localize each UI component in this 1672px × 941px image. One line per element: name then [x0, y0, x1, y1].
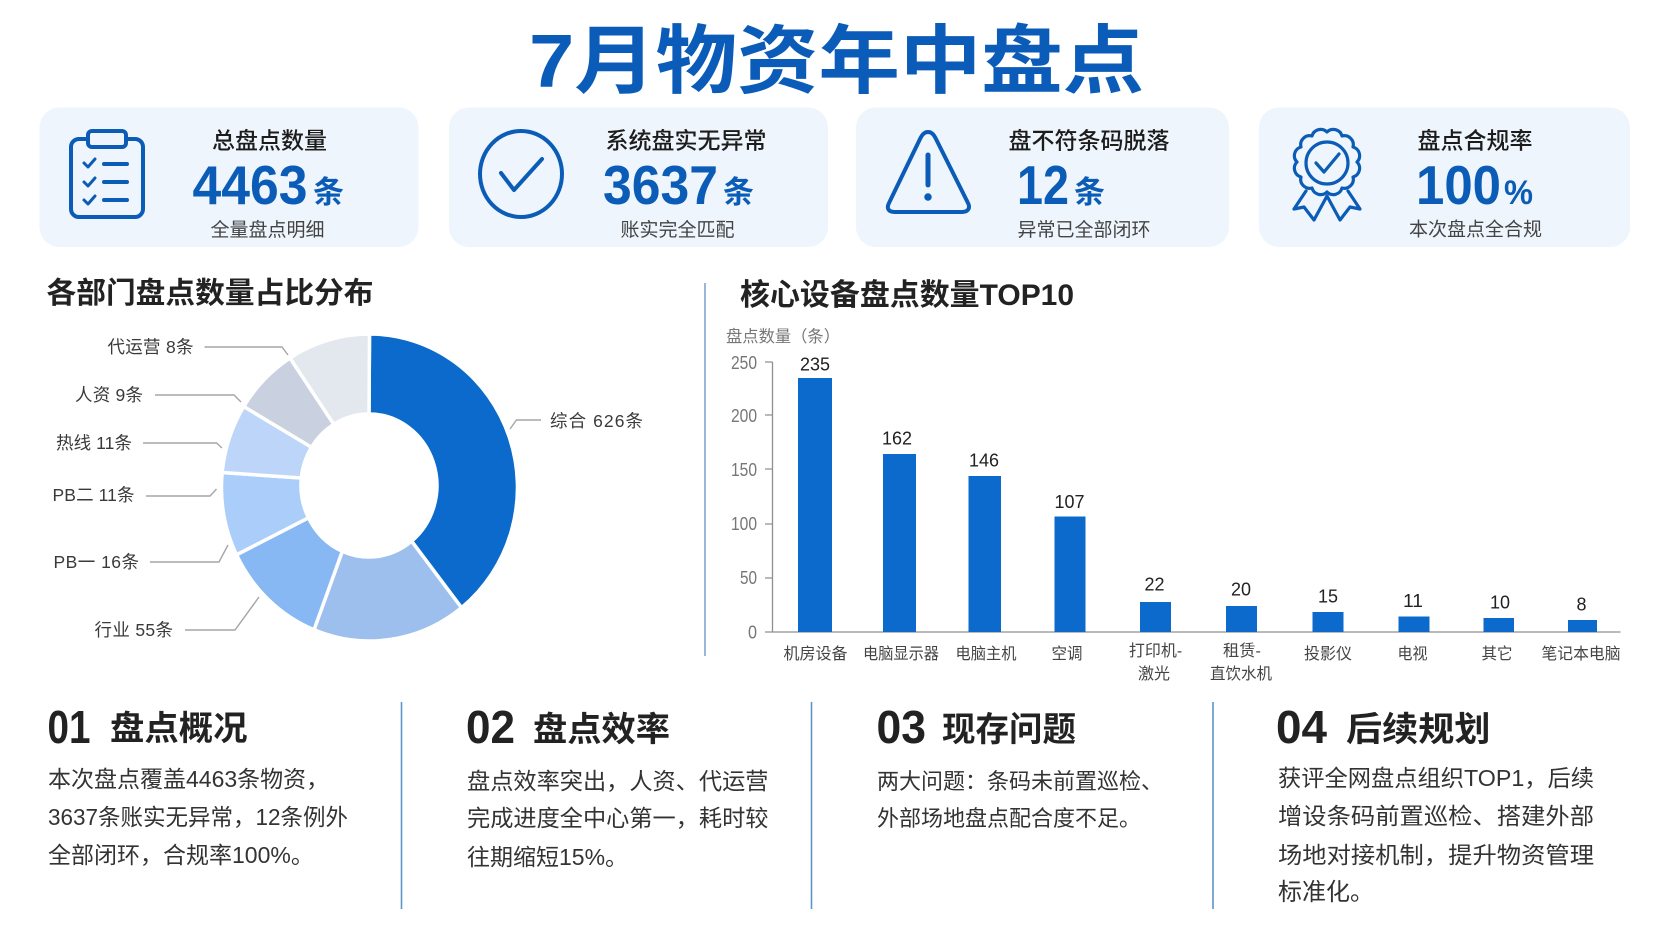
- donut chart: [221, 334, 517, 641]
- body: [877, 769, 1163, 831]
- y tick labels: 150: [731, 460, 757, 480]
- slice: 行业 (next): [314, 541, 462, 641]
- value labels: [800, 354, 1586, 614]
- heading: 现存问题: [942, 711, 1076, 749]
- body: 增设条码前置巡检、搭建外部: [1278, 803, 1594, 829]
- category labels: 笔记本电脑: [1542, 645, 1620, 663]
- category labels: 机房设备: [784, 645, 848, 663]
- category labels: 空调: [1052, 645, 1082, 663]
- heading: bar chart: 核心设备盘点数量TOP10: [740, 279, 1074, 312]
- heading: 后续规划: [1346, 711, 1490, 749]
- heading: total count: 总盘点数量: [212, 128, 327, 154]
- body: [1278, 765, 1594, 906]
- donut labels: 人资 9条: [75, 385, 143, 405]
- donut labels: PB一 16条: [54, 552, 139, 572]
- block: 04 plan: [1276, 701, 1594, 906]
- category labels: 其它: [1482, 645, 1512, 663]
- value labels: 235: [800, 354, 830, 374]
- value: 12: 12: [1017, 154, 1069, 216]
- value labels: 11: [1403, 590, 1423, 611]
- heading: no anomaly: 系统盘实无异常: [606, 128, 766, 154]
- panel: compliance card: [1259, 108, 1630, 247]
- y tick labels: 250: [731, 353, 757, 373]
- slice: 综合: [369, 334, 517, 608]
- body: 3637条账实无异常，12条例外: [48, 804, 348, 830]
- category labels: [784, 642, 1620, 683]
- unit: 条: [723, 175, 754, 210]
- heading: compliance: 盘点合规率: [1418, 128, 1532, 154]
- body: 场地对接机制，提升物资管理: [1278, 842, 1594, 868]
- bar chart: [731, 353, 1620, 683]
- slice: 55: [236, 518, 342, 630]
- slice: PB二: [222, 406, 312, 478]
- donut labels: 行业 55条: [94, 620, 173, 640]
- body: 外部场地盘点配合度不足。: [877, 806, 1141, 831]
- unit: 条: [313, 175, 344, 210]
- panel: no anomaly card: [449, 108, 828, 247]
- category labels: 直饮水机: [1210, 665, 1272, 683]
- body: [48, 766, 348, 868]
- bars: [798, 378, 1597, 632]
- heading: 盘点概况: [110, 710, 248, 748]
- body: 盘点效率突出，人资、代运营: [467, 768, 768, 794]
- donut labels: 代运营 8条: [108, 337, 194, 357]
- category labels: 激光: [1138, 665, 1170, 683]
- axis title: 盘点数量（条）: [726, 327, 840, 346]
- body: 两大问题：条码未前置巡检、: [877, 769, 1163, 794]
- divider between charts: [704, 283, 706, 656]
- y tick labels: [731, 353, 757, 642]
- y tick labels: 100: [731, 514, 757, 534]
- divider: [1212, 702, 1214, 909]
- icon: check circle: [480, 131, 562, 217]
- body: 获评全网盘点组织TOP1，后续: [1278, 765, 1594, 791]
- y tick labels: 200: [731, 406, 757, 426]
- slice: 人资: [244, 358, 334, 447]
- value labels: 15: [1318, 586, 1338, 606]
- donut labels: 热线 11条: [56, 433, 132, 453]
- value labels: 20: [1231, 578, 1251, 600]
- donut labels: PB二 11条: [52, 485, 134, 505]
- value labels: 10: [1490, 592, 1510, 612]
- icon: warning triangle: [888, 132, 969, 212]
- unit: 条: [1074, 175, 1105, 210]
- block: 03 issues: [876, 701, 1163, 831]
- title: 7月物资年中盘点: [529, 19, 1144, 103]
- divider: [400, 702, 402, 909]
- heading: 盘点效率: [533, 711, 670, 749]
- body: 完成进度全中心第一，耗时较: [467, 805, 768, 831]
- heading: mismatch: 盘不符条码脱落: [1008, 128, 1170, 154]
- slice: PB一: [221, 472, 308, 555]
- caption: 异常已全部闭环: [1017, 219, 1151, 241]
- body: [467, 768, 768, 870]
- number: 03: [876, 701, 926, 753]
- category labels: 电脑显示器: [863, 645, 939, 663]
- heading: donut: 各部门盘点数量占比分布: [46, 277, 374, 310]
- caption: 账实完全匹配: [620, 219, 735, 241]
- block: 01 overview: [48, 701, 348, 868]
- panel: total count card: [40, 108, 418, 247]
- value: 4463: 4463: [192, 154, 308, 216]
- panel: mismatch card: [856, 108, 1229, 247]
- category labels: 投影仪: [1304, 645, 1352, 663]
- donut labels: 综合 626条: [550, 411, 643, 431]
- value labels: 107: [1054, 491, 1084, 512]
- block: 02 efficiency: [466, 701, 768, 870]
- y tick labels: 50: [740, 568, 757, 588]
- axes: [765, 362, 1620, 632]
- slice: 代运营: [290, 334, 370, 424]
- caption: 本次盘点全合规: [1409, 218, 1542, 240]
- value: 3637: 3637: [603, 154, 718, 216]
- icon: rosette badge: [1294, 129, 1360, 220]
- value labels: 146: [969, 450, 999, 470]
- donut labels: [52, 337, 643, 640]
- unit: percent: %: [1504, 174, 1533, 212]
- number: 01: [48, 701, 90, 753]
- category labels: 电视: [1398, 645, 1428, 663]
- value labels: 162: [882, 428, 912, 448]
- category labels: 打印机-: [1129, 642, 1182, 660]
- body: 全部闭环，合规率100%。: [48, 842, 314, 868]
- category labels: 租赁-: [1223, 642, 1261, 660]
- category labels: 电脑主机: [956, 645, 1016, 663]
- number: 04: [1276, 701, 1327, 753]
- body: 往期缩短15%。: [467, 844, 628, 870]
- icon: clipboard: [71, 131, 143, 217]
- value labels: 8: [1576, 594, 1586, 614]
- y tick labels: 0: [748, 622, 757, 642]
- value labels: 22: [1144, 574, 1164, 594]
- value: 100: 100: [1416, 154, 1501, 216]
- number: 02: [466, 701, 515, 753]
- caption: 全量盘点明细: [210, 219, 325, 241]
- body: 本次盘点覆盖4463条物资，: [48, 766, 329, 792]
- body: 标准化。: [1278, 879, 1374, 906]
- divider: [810, 702, 812, 909]
